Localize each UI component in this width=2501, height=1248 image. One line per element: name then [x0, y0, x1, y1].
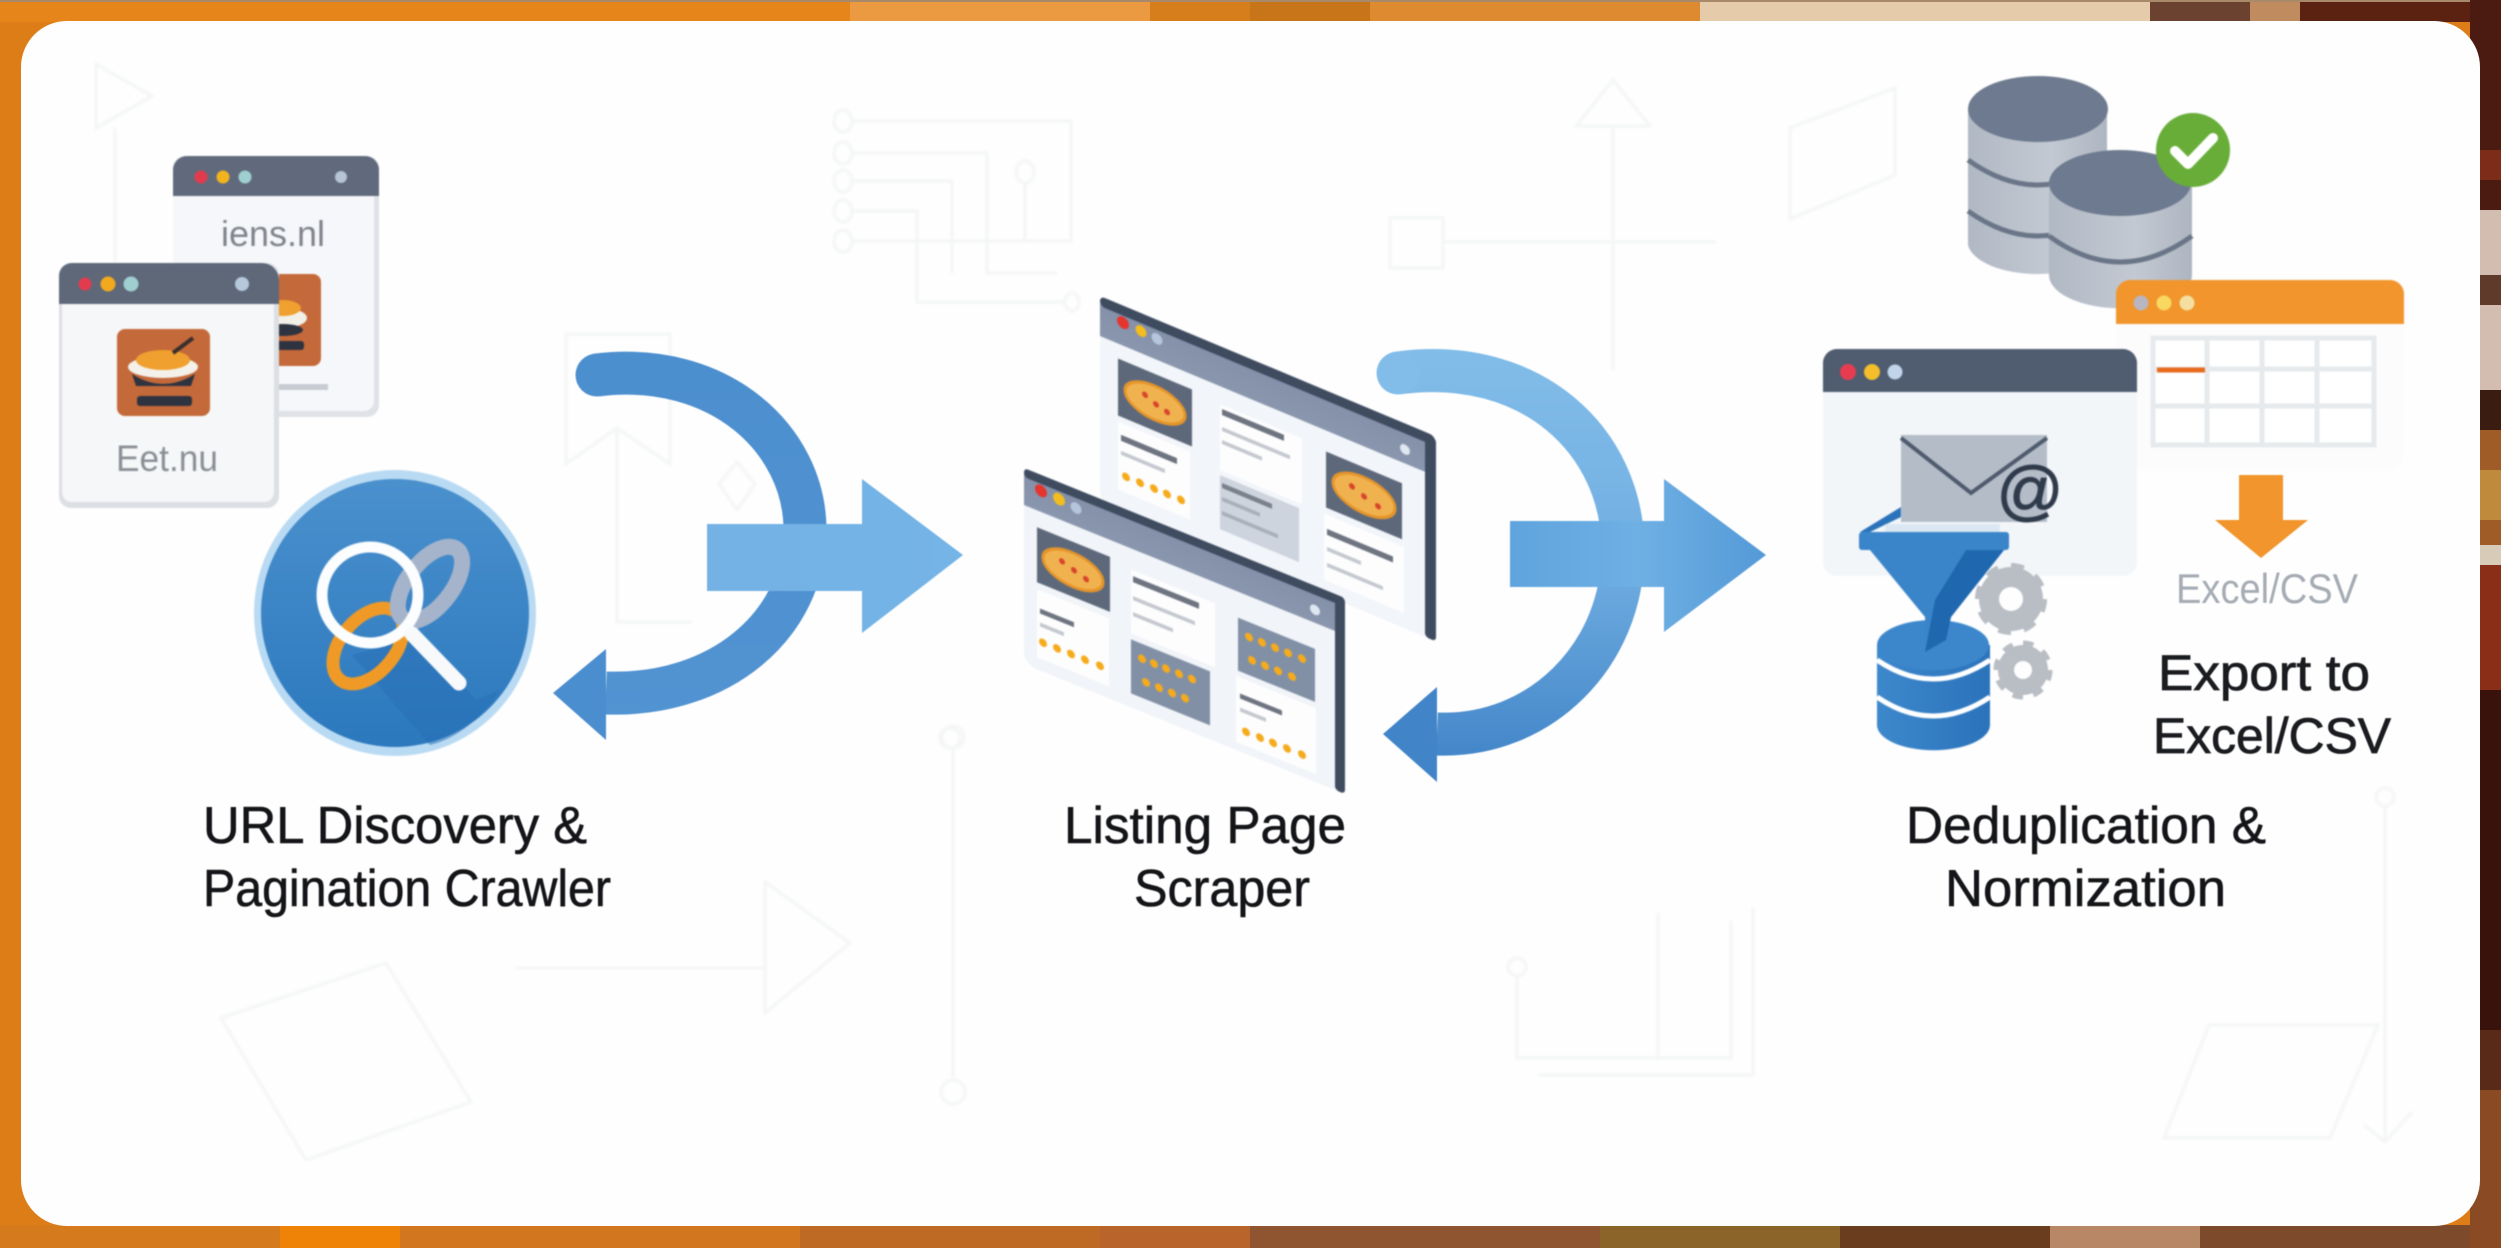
spreadsheet grid [2153, 338, 2374, 445]
icon: envelope: @ [1996, 453, 2064, 527]
heading: export to Excel/CSV: Export to [2158, 645, 2370, 701]
icon: magnifier [322, 547, 459, 683]
step 3: databases and check [1968, 76, 2230, 308]
forward arrow 2 [1510, 479, 1766, 632]
spreadsheet window [2116, 280, 2404, 470]
Excel/CSV file caption: Excel/CSV [2176, 565, 2358, 612]
icon: blue database [1877, 620, 1990, 750]
listing card: left [1118, 359, 1192, 520]
icon: funnel [1859, 507, 2009, 652]
icon: funnel into database [1859, 507, 2009, 750]
listing card: image and stars [1037, 527, 1110, 687]
loop arrow 2 [1376, 352, 1623, 782]
icon: link search badge [254, 470, 536, 756]
icon: food bowl [117, 329, 210, 416]
heading: deduplication: Deduplication & [1906, 797, 2266, 855]
browser window with envelope [1823, 349, 2137, 576]
window: Eet.nu: Eet.nu [116, 438, 218, 479]
listing card: right [1236, 617, 1316, 774]
listing card: middle [1131, 569, 1215, 727]
front listing window [1024, 468, 1345, 794]
heading: export to Excel/CSV: Excel/CSV [2153, 708, 2392, 764]
icon: grey database front [2049, 150, 2192, 308]
heading: deduplication: Normization [1945, 860, 2226, 918]
back listing window [1100, 296, 1436, 641]
window: iens.nl [173, 156, 379, 417]
icon: gears [1979, 567, 2049, 696]
loop arrow 1 [553, 354, 805, 740]
heading: URL discovery: URL Discovery & [203, 797, 587, 855]
forward arrow 1 [707, 479, 963, 633]
heading: listing page scraper: Listing Page [1064, 797, 1346, 855]
step 2: listing page windows [1024, 296, 1436, 794]
window: iens.nl: iens.nl [221, 213, 325, 254]
heading: listing page scraper: Scraper [1134, 860, 1310, 918]
icon: grey database back [1968, 76, 2108, 274]
heading: URL discovery: Pagination Crawler [203, 860, 611, 918]
icon: chain [319, 536, 474, 697]
window: Eet.nu [59, 263, 279, 508]
listing card: right [1324, 451, 1404, 613]
export arrow [2215, 475, 2308, 558]
icon: green check [2156, 113, 2230, 187]
step 1: source site windows [59, 156, 379, 508]
listing card: middle [1220, 404, 1302, 563]
icon: envelope [1901, 435, 2064, 527]
